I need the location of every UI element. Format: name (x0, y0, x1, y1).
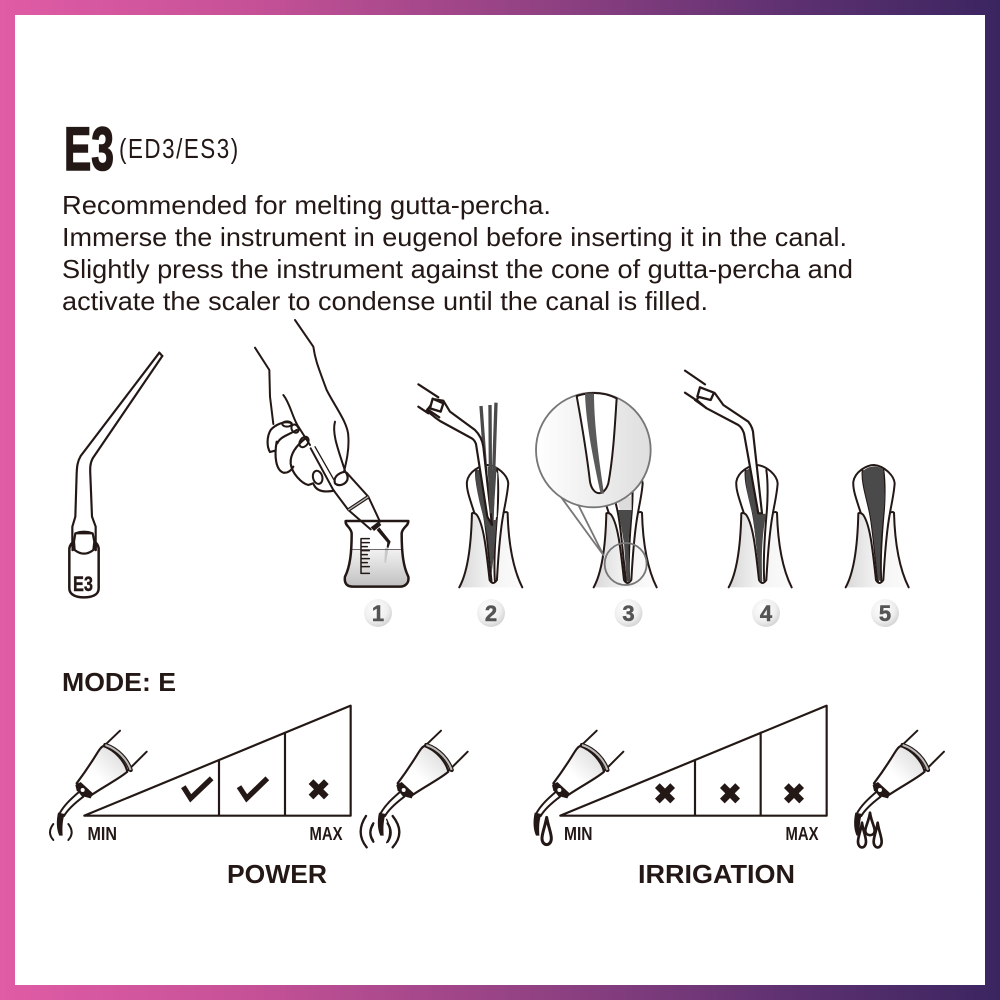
cross mark (657, 786, 673, 801)
description text block: activate the scaler to condense until the canal is filled. (62, 286, 708, 316)
cross mark (722, 786, 738, 801)
icon: handpiece low vibration (50, 731, 147, 840)
badge 5: 5 (879, 601, 891, 626)
label: max: MAX (786, 823, 819, 844)
power chart (50, 706, 468, 889)
icon: handpiece high vibration (361, 731, 468, 847)
magnifier lens (536, 393, 651, 507)
check mark (239, 778, 267, 798)
magnified canal (577, 393, 617, 493)
instrument (427, 399, 492, 525)
title: E3 (ED3/ES3): E3 (64, 115, 114, 183)
badge 5 (871, 599, 899, 627)
badge 2 (477, 599, 505, 627)
heading: mode: MODE: E (62, 667, 176, 697)
description text block: Immerse the instrument in eugenol before inserting it in the canal. (62, 222, 847, 252)
icon: E3 scaler tip (69, 353, 162, 597)
gutta-percha cones (481, 403, 496, 522)
badge 4: 4 (760, 601, 773, 626)
label: max: MAX (310, 823, 343, 844)
step 1: hand dipping instrument in eugenol beaker (255, 320, 408, 587)
step 3: zoomed detail of tooth apex (536, 393, 657, 587)
cross mark (786, 786, 802, 801)
description text block: Slightly press the instrument against the cone of gutta-percha and (62, 254, 853, 284)
icon: E3 scaler tip: E3 (73, 573, 93, 596)
step 5: filled canal (846, 465, 909, 587)
step 4: instrument condensing filling (685, 371, 792, 587)
callout wedge (558, 493, 603, 555)
instrument handpiece (311, 447, 391, 548)
cross mark (311, 782, 326, 797)
title: E3 (ED3/ES3) (64, 115, 240, 183)
icon: handpiece many drops (854, 731, 944, 847)
hand outline (255, 320, 349, 491)
check mark (183, 778, 212, 798)
label: min: MIN (564, 823, 592, 844)
label: power: POWER (227, 859, 327, 889)
icon: handpiece single drop (534, 731, 623, 845)
step number badges (364, 599, 899, 627)
badge 3: 3 (622, 601, 635, 626)
irrigation triangle scale (560, 706, 827, 816)
canal fill (617, 497, 632, 511)
description text block: Recommended for melting gutta-percha. (62, 190, 551, 220)
beaker (345, 521, 408, 587)
description text block (62, 190, 853, 316)
badge 2: 2 (485, 601, 497, 626)
small magnifier circle (605, 543, 647, 585)
irrigation chart (534, 706, 944, 889)
label: irrigation: IRRIGATION (638, 859, 795, 889)
badge 3 (614, 599, 642, 627)
instrument (697, 389, 762, 513)
badge 4 (752, 599, 780, 627)
label: min: MIN (88, 823, 117, 844)
badge 1: 1 (372, 601, 384, 626)
filling in canal (476, 469, 497, 573)
badge 1 (364, 599, 392, 627)
step 2: gutta-percha cones with instrument in tooth (418, 384, 522, 587)
title: E3 (ED3/ES3): (ED3/ES3) (119, 134, 240, 165)
power triangle scale (84, 706, 351, 816)
